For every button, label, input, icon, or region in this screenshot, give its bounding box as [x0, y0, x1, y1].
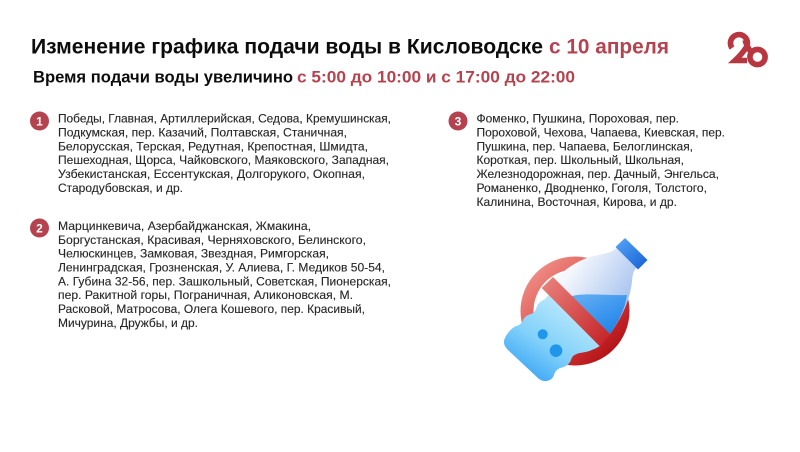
- panel: street group 2: [30, 218, 391, 330]
- text block: streets 1: Узбекистанская, Ессентукская, Долгорукого, Окопная,: [58, 167, 365, 181]
- badge: 1: 1: [36, 114, 43, 128]
- text block: streets 2: Ленинградская, Грозненская, У. Алиева, Г. Медиков 50-54,: [58, 260, 385, 274]
- text block: streets 2: [58, 219, 391, 330]
- text block: streets 2: Расковой, Матросова, Олега Кошевого, пер. Красивый,: [58, 302, 365, 316]
- text block: streets 3: Романенко, Дводненко, Гоголя, Толстого,: [476, 181, 707, 195]
- badge: 3: [448, 112, 468, 130]
- text block: streets 2: А. Губина 32-56, пер. Зашкольный, Советская, Пионерская,: [58, 274, 391, 288]
- title: Изменение графика подачи воды в Кисловодске: [31, 34, 543, 58]
- panel: street group 3: [448, 112, 725, 209]
- text block: streets 3: [476, 112, 725, 209]
- bottle upper part: [553, 248, 637, 352]
- text block: streets 2: Марцинкевича, Азербайджанская, Жмакина,: [58, 219, 311, 233]
- icon: crossed-out water bottle: [504, 239, 646, 381]
- text block: streets 1: Победы, Главная, Артиллерийская, Седова, Кремушинская,: [58, 112, 391, 126]
- slash: [542, 277, 610, 346]
- text block: streets 1: Пешеходная, Щорса, Чайковского, Маяковского, Западная,: [58, 153, 389, 167]
- bottle lower body: [504, 293, 600, 381]
- text block: streets 3: Короткая, пер. Школьный, Школьная,: [476, 153, 684, 167]
- badge: 1: [30, 112, 49, 130]
- text block: streets 2: Мичурина, Дружбы, и др.: [58, 316, 198, 330]
- prohibition ring: [527, 263, 623, 359]
- badge: 2: 2: [36, 222, 43, 236]
- text block: streets 2: Боргустанская, Красивая, Черняховского, Белинского,: [58, 233, 366, 247]
- text block: streets 3: Фоменко, Пушкина, Пороховая, пер.: [476, 112, 679, 126]
- text block: streets 3: Пороховой, Чехова, Чапаева, Киевская, пер.: [476, 126, 725, 140]
- text block: streets 3: Калинина, Восточная, Кирова, и др.: [476, 195, 677, 209]
- subtitle: water supply hours: с 5:00 до 10:00 и с 17:00 до 22:00: [297, 68, 575, 86]
- text block: streets 1: Подкумская, пер. Казачий, Полтавская, Станичная,: [58, 126, 347, 140]
- text block: streets 1: Белорусская, Терская, Редутная, Крепостная, Шмидта,: [58, 139, 368, 153]
- subtitle: water supply hours: [33, 68, 575, 86]
- subtitle: water supply hours: Время подачи воды увеличино: [33, 68, 293, 86]
- bottle dots: [538, 329, 562, 357]
- text block: streets 1: Стародубовская, и др.: [58, 181, 183, 195]
- bottle cap: [616, 239, 646, 268]
- water: [568, 294, 627, 334]
- text block: streets 2: пер. Ракитной горы, Пограничная, Аликоновская, М.: [58, 288, 353, 302]
- text block: streets 3: Пушкина, пер. Чапаева, Белоглинская,: [476, 139, 693, 153]
- badge: 3: 3: [455, 114, 462, 128]
- logo: 26: [730, 35, 765, 65]
- text block: streets 2: Челюскинцев, Замковая, Звездная, Римгорская,: [58, 247, 329, 261]
- text block: streets 3: Железнодорожная, пер. Дачный, Энгельса,: [476, 167, 719, 181]
- panel: street group 1: [30, 112, 391, 195]
- badge: 2: [30, 218, 49, 238]
- title: с 10 апреля: [549, 34, 669, 58]
- text block: streets 1: [58, 112, 391, 195]
